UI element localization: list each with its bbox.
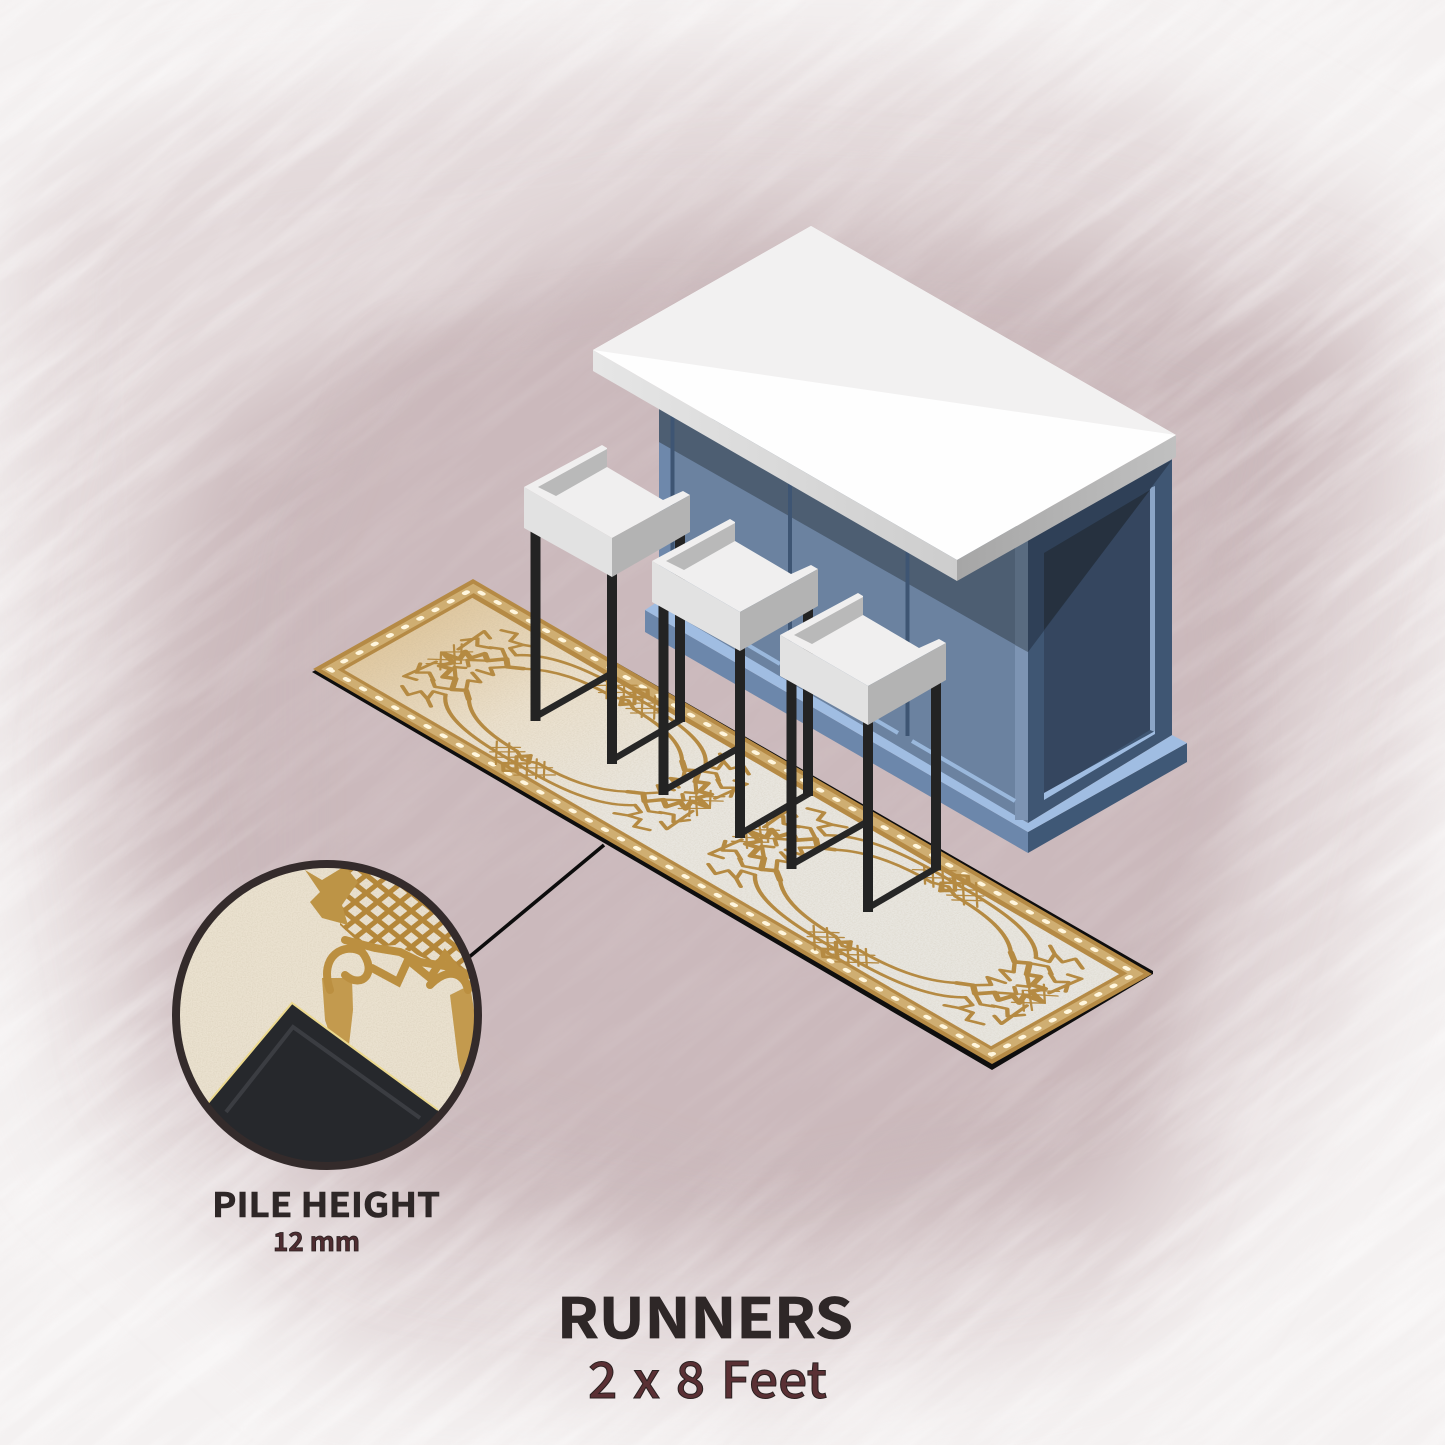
rug black underside [312,580,1153,1070]
rug grain [344,598,1119,1046]
stool 1 [524,445,690,764]
counter left face [659,400,1028,823]
countertop [593,226,1176,581]
label: 12 mm: 12 mm [273,1222,360,1259]
gold scrolls and legs [305,868,474,1076]
rug pile grain [180,868,466,1109]
connector line from rug to detail circle [468,845,604,958]
rug field [344,598,1119,1046]
counter right face [1028,452,1172,823]
medallion right [674,789,1117,1044]
medallion left [369,611,782,849]
stool 2 [652,519,818,838]
label: pile height: PILE HEIGHT [212,1178,440,1227]
dark backing fabric [209,1004,438,1162]
bar counter island [593,226,1187,853]
gold lattice [340,868,466,970]
stool 3 [780,593,946,912]
rug border [313,579,1152,1064]
subtitle: size: 2 x 8 Feet [588,1341,827,1413]
rug: runner [312,579,1153,1070]
title: runners: RUNNERS [557,1274,853,1354]
detail circle: rug corner close-up [172,860,482,1170]
counter plinth [645,600,1187,853]
